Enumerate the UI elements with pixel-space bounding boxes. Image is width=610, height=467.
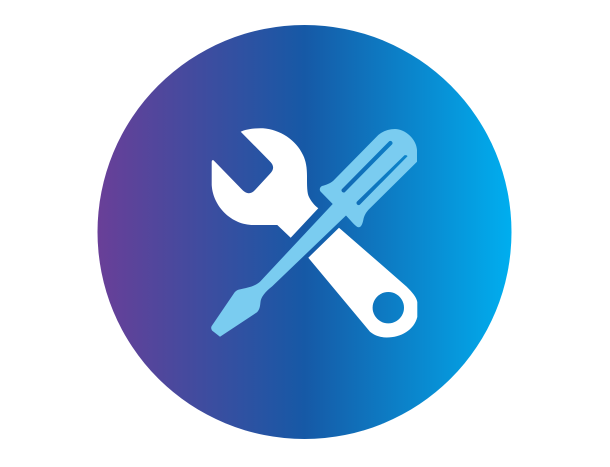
icon: screwdriver — [211, 129, 417, 337]
icon: crossed wrench and screwdriver — [211, 128, 417, 338]
gradient circle background — [98, 25, 512, 439]
icon: wrench handle — [308, 228, 417, 338]
icon: wrench head — [212, 128, 318, 238]
